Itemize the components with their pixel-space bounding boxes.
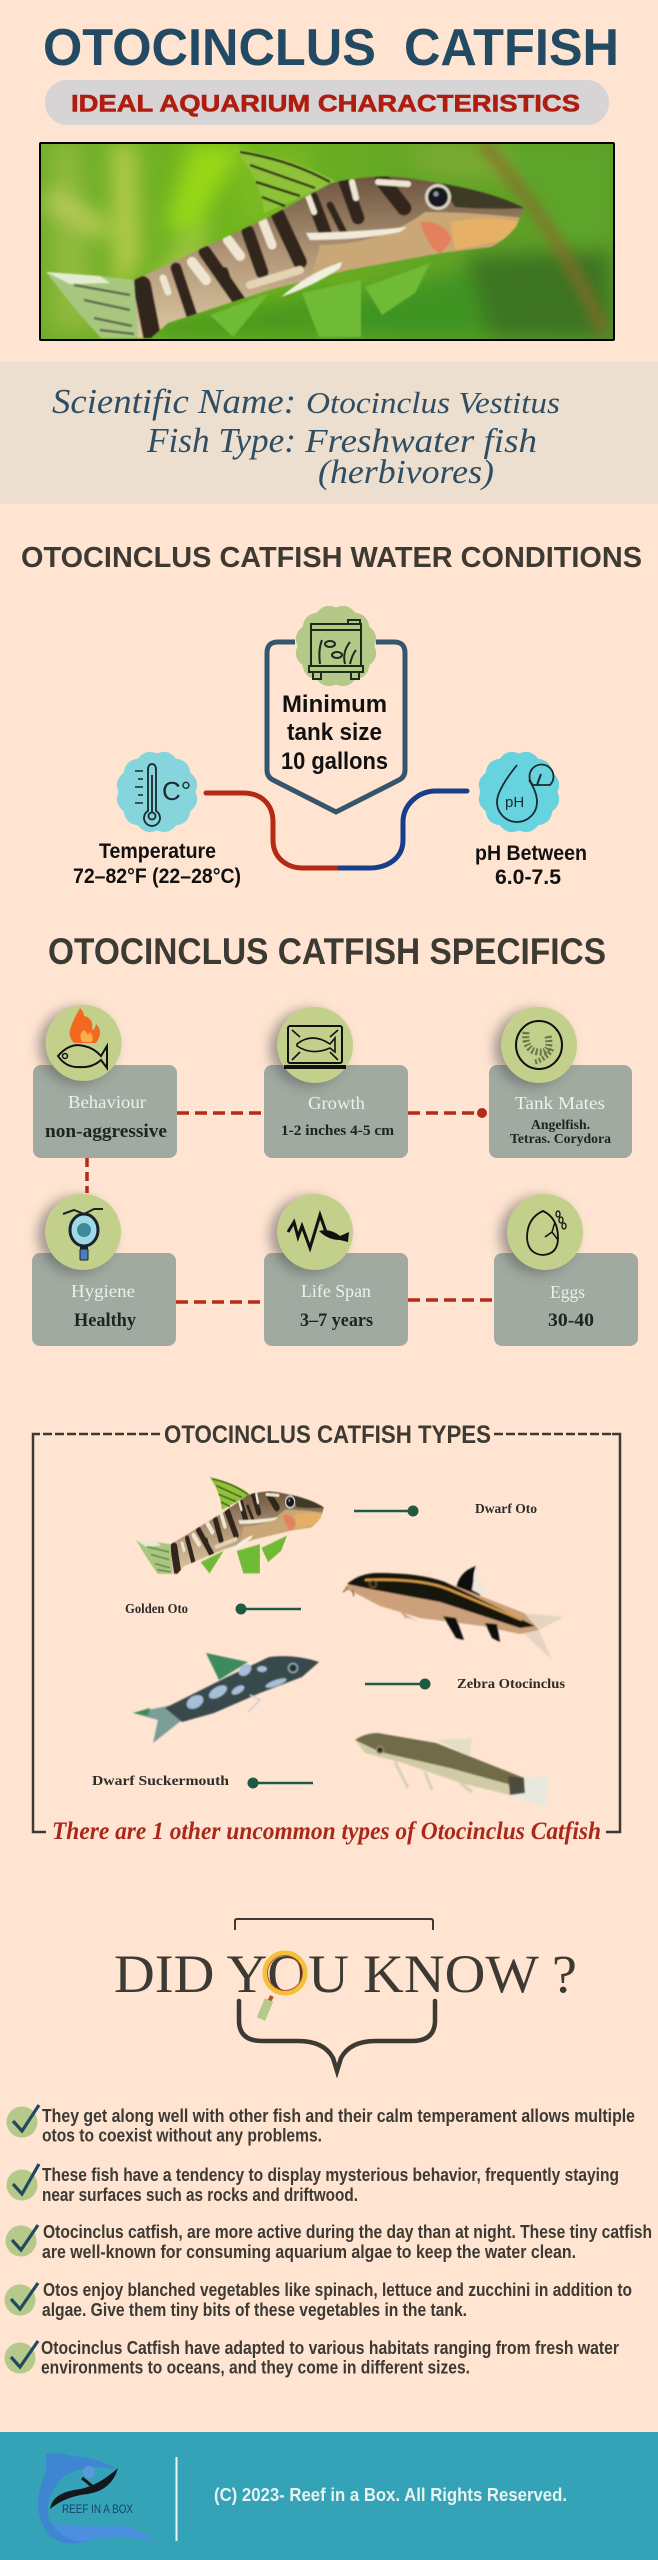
card: hygiene bbox=[32, 1194, 176, 1346]
icon: thermometer: C° bbox=[162, 776, 191, 806]
icon: aquarium bbox=[296, 606, 376, 686]
types heading: OTOCINCLUS CATFISH TYPES bbox=[164, 1421, 491, 1449]
fish type: (herbivores) bbox=[318, 454, 494, 491]
hero photo: otocinclus catfish in green plants bbox=[39, 142, 615, 341]
card: life span: Life Span bbox=[301, 1281, 371, 1301]
pH text: 6.0-7.5 bbox=[495, 866, 561, 889]
fact 3 bbox=[6, 2221, 652, 2262]
pH text bbox=[475, 842, 587, 889]
card: growth: Growth bbox=[308, 1093, 365, 1113]
title: OTOCINCLUS CATFISH bbox=[43, 19, 619, 77]
card: tank mates: Tank Mates bbox=[515, 1093, 605, 1113]
card: behaviour bbox=[33, 1005, 177, 1158]
check icon bbox=[4, 2341, 38, 2374]
card: tank mates: Tetras. Corydora bbox=[510, 1131, 611, 1146]
temperature text: 72–82°F (22–28°C) bbox=[73, 865, 241, 888]
icon: thermometer bbox=[117, 752, 197, 832]
uncommon types note: There are 1 other uncommon types of Otocinclus Catfish bbox=[52, 1818, 601, 1845]
label: zebra otocinclus: Zebra Otocinclus bbox=[457, 1676, 565, 1691]
card: eggs: Eggs bbox=[550, 1282, 585, 1302]
scientific name: Otocinclus Vestitus bbox=[306, 385, 560, 420]
pH bbox=[475, 752, 587, 889]
fact 5: environments to oceans, and they come in different sizes. bbox=[41, 2356, 470, 2378]
icon: pH drop: pH bbox=[505, 794, 524, 811]
temperature bbox=[73, 752, 241, 888]
card: life span bbox=[264, 1194, 408, 1346]
icon: magnifier bbox=[45, 1194, 121, 1270]
card: life span: 3–7 years bbox=[300, 1310, 373, 1331]
fact 2: near surfaces such as rocks and driftwood. bbox=[42, 2184, 358, 2205]
fish: zebra otocinclus bbox=[133, 1653, 319, 1743]
card: behaviour: Behaviour bbox=[68, 1092, 146, 1112]
scientific name bbox=[52, 382, 560, 421]
heading: specifics: OTOCINCLUS CATFISH SPECIFICS bbox=[48, 931, 606, 972]
did you know heading: DID YOU KNOW ? bbox=[114, 1944, 577, 2004]
fish type: Fish Type: bbox=[146, 421, 296, 460]
fish: golden oto bbox=[343, 1566, 564, 1660]
heading: water conditions: OTOCINCLUS CATFISH WATER CONDITIONS bbox=[21, 542, 642, 574]
footer bbox=[0, 2432, 658, 2560]
subtitle pill bbox=[45, 80, 609, 125]
dashed connectors bbox=[87, 1108, 494, 1302]
card: hygiene: Healthy bbox=[74, 1310, 136, 1331]
card: eggs: 30-40 bbox=[548, 1310, 594, 1331]
fish: dwarf suckermouth bbox=[355, 1733, 550, 1807]
fact 1 bbox=[6, 2105, 635, 2146]
fish: dwarf oto bbox=[136, 1477, 325, 1574]
fact 1: otos to coexist without any problems. bbox=[42, 2124, 322, 2146]
copyright: (C) 2023- Reef in a Box. All Rights Reserved. bbox=[214, 2485, 567, 2505]
label: golden oto bbox=[125, 1601, 301, 1616]
card: growth: 1-2 inches 4-5 cm bbox=[281, 1123, 395, 1139]
subtitle pill: IDEAL AQUARIUM CHARACTERISTICS bbox=[71, 90, 580, 118]
check icon bbox=[6, 2105, 39, 2138]
tank size text: tank size bbox=[287, 719, 382, 746]
label: zebra otocinclus bbox=[365, 1676, 565, 1691]
card: tank mates bbox=[489, 1007, 632, 1158]
fact 4 bbox=[4, 2279, 632, 2320]
panel: catfish types frame bbox=[33, 1421, 620, 1845]
tank size text: 10 gallons bbox=[281, 748, 388, 775]
scientific info band bbox=[0, 362, 658, 504]
fact 4: algae. Give them tiny bits of these vegetables in the tank. bbox=[42, 2299, 467, 2320]
icon: magnifying glass bbox=[261, 1953, 305, 2019]
fish type bbox=[146, 421, 537, 491]
card: eggs bbox=[494, 1194, 638, 1346]
tank size text bbox=[281, 691, 388, 775]
temperature text bbox=[73, 840, 241, 888]
label: dwarf suckermouth bbox=[92, 1773, 313, 1788]
fact 5 bbox=[4, 2337, 619, 2378]
card: tank mates: Angelfish. bbox=[531, 1117, 590, 1132]
connector lines bbox=[206, 791, 467, 868]
icon: egg bbox=[507, 1194, 583, 1270]
check icon bbox=[4, 2283, 38, 2316]
check icon bbox=[6, 2164, 39, 2200]
scientific name: Scientific Name: bbox=[52, 382, 296, 421]
icon: heartbeat with fish bbox=[277, 1194, 353, 1270]
label: dwarf suckermouth: Dwarf Suckermouth bbox=[92, 1773, 230, 1788]
icon: fish on screen bbox=[277, 1007, 353, 1083]
label: dwarf oto bbox=[354, 1501, 537, 1516]
pH text: pH Between bbox=[475, 842, 587, 865]
card: behaviour: non-aggressive bbox=[45, 1121, 167, 1142]
minimum tank size shield bbox=[267, 606, 405, 812]
card: growth bbox=[264, 1007, 408, 1158]
logo: reef in a box: REEF IN A BOX bbox=[62, 2502, 133, 2516]
card: hygiene: Hygiene bbox=[71, 1281, 135, 1301]
divider bbox=[176, 2457, 178, 2541]
icon: fish with flame bbox=[46, 1005, 122, 1081]
label: golden oto: Golden Oto bbox=[125, 1601, 188, 1616]
curly brace bbox=[239, 2001, 435, 2071]
fact 3: are well-known for consuming aquarium algae to keep the water clean. bbox=[42, 2241, 576, 2262]
fact 2 bbox=[6, 2164, 619, 2205]
fish type: Freshwater fish bbox=[304, 423, 537, 460]
logo: reef in a box bbox=[38, 2453, 154, 2544]
tank size text: Minimum bbox=[282, 691, 387, 718]
check icon bbox=[6, 2225, 38, 2256]
temperature text: Temperature bbox=[99, 840, 216, 863]
icon: school of fish bbox=[501, 1007, 577, 1083]
label: dwarf oto: Dwarf Oto bbox=[475, 1501, 537, 1516]
did you know heading bbox=[114, 1919, 577, 2071]
